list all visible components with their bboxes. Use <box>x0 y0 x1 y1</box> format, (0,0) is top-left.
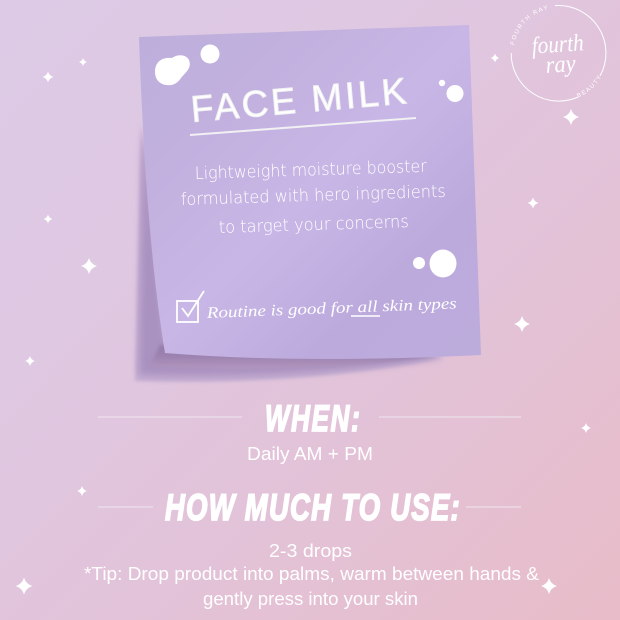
icon: milk drops top right <box>439 80 464 102</box>
how much text: gently press into your skin <box>203 589 418 609</box>
when rules <box>98 416 521 418</box>
logo ring <box>511 5 606 101</box>
when heading: WHEN: <box>265 397 361 439</box>
logo script <box>531 30 584 79</box>
how much text: *Tip: Drop product into palms, warm between hands & <box>84 564 539 584</box>
description text: Lightweight moisture booster <box>195 157 427 184</box>
section: when <box>98 397 521 464</box>
description text: to target your concerns <box>219 212 409 238</box>
panel: sticky note <box>135 25 481 382</box>
heading underline <box>190 118 416 135</box>
how much rules <box>98 506 521 508</box>
when text: Daily AM + PM <box>247 444 373 464</box>
icon: checkbox <box>177 291 204 322</box>
logo ring text: FOURTH RAY <box>510 5 547 45</box>
icon: milk drops lower right <box>413 250 456 278</box>
routine text: Routine is good for all skin types <box>205 295 457 322</box>
underline on all <box>351 315 380 317</box>
description text: formulated with hero ingredients <box>181 182 446 210</box>
description text <box>181 157 446 238</box>
logo script: ray <box>545 51 577 79</box>
note shadow <box>135 125 445 382</box>
how much text: 2-3 drops <box>269 541 352 561</box>
how much heading: HOW MUCH TO USE: <box>165 487 461 528</box>
section: how much to use <box>84 487 539 609</box>
note paper <box>139 25 481 359</box>
logo ring text bottom: BEAUTY <box>576 75 600 98</box>
heading: face milk: FACE MILK <box>189 70 408 130</box>
logo <box>510 5 606 102</box>
how much text <box>84 541 539 609</box>
logo script: fourth <box>531 30 584 60</box>
icon: milk splash top left <box>155 44 220 85</box>
